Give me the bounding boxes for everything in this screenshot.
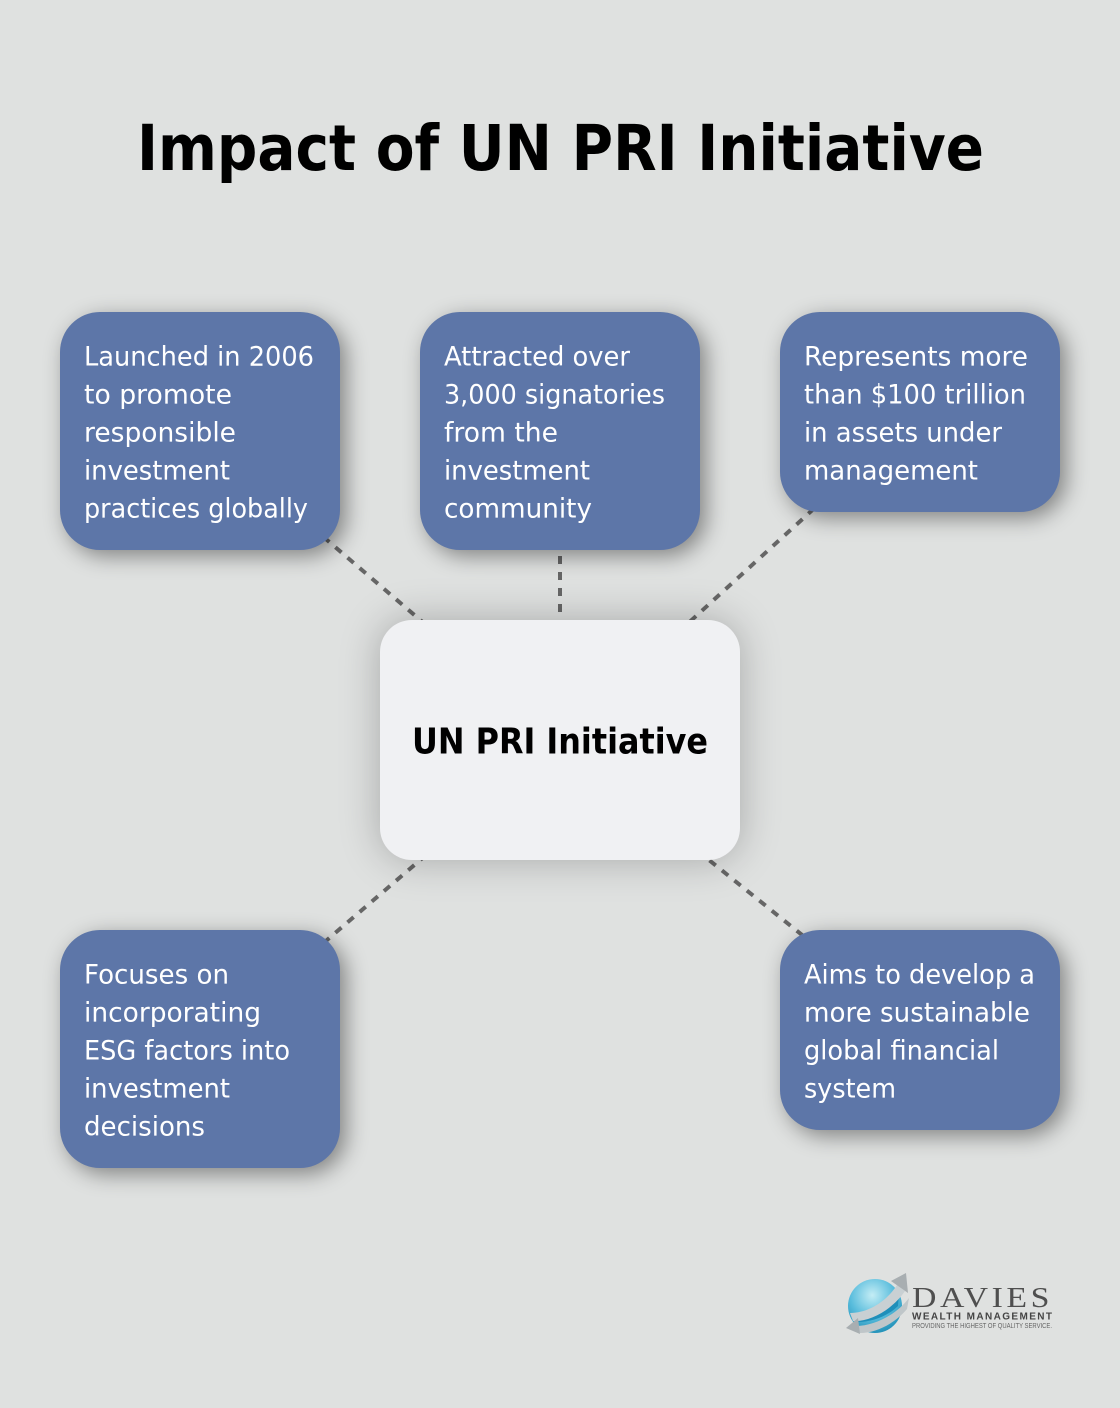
panel: 3,000 signatories: from the xyxy=(444,418,558,448)
panel: $100 trillion: Represents more xyxy=(804,342,1028,372)
panel: ESG factors: investment xyxy=(84,1074,230,1104)
logo wordmark: PROVIDING THE HIGHEST OF QUALITY SERVICE. xyxy=(912,1323,1052,1330)
panel: sustainable system xyxy=(780,930,1060,1130)
panel: ESG factors: incorporating xyxy=(84,998,261,1028)
panel: launched in 2006: practices globally xyxy=(84,494,308,524)
panel: $100 trillion: in assets under xyxy=(804,418,1003,448)
panel: ESG factors: decisions xyxy=(84,1112,205,1142)
panel: center node xyxy=(380,620,740,860)
panel: launched in 2006: Launched in 2006 xyxy=(84,342,314,372)
panel: $100 trillion xyxy=(780,312,1060,512)
panel: 3,000 signatories: investment xyxy=(444,456,590,486)
panel: ESG factors xyxy=(60,930,340,1168)
logo wordmark xyxy=(912,1283,1053,1330)
panel: $100 trillion: than $100 trillion xyxy=(804,380,1026,410)
panel: launched in 2006 xyxy=(60,312,340,550)
panel: ESG factors: ESG factors into xyxy=(84,1036,290,1066)
panel: 3,000 signatories: 3,000 signatories xyxy=(444,380,665,410)
panel: sustainable system: Aims to develop a xyxy=(804,960,1035,990)
panel: launched in 2006: responsible xyxy=(84,418,236,448)
panel: sustainable system: more sustainable xyxy=(804,998,1030,1028)
panel: 3,000 signatories xyxy=(420,312,700,550)
logo: Davies Wealth Management xyxy=(846,1273,1053,1334)
panel: launched in 2006: to promote xyxy=(84,380,232,410)
panel: sustainable system: system xyxy=(804,1074,896,1104)
panel: center node: UN PRI Initiative xyxy=(412,722,708,762)
panel: ESG factors: Focuses on xyxy=(84,960,229,990)
panel: launched in 2006: investment xyxy=(84,456,230,486)
title: Impact of UN PRI Initiative xyxy=(137,111,984,185)
logo wordmark: DAVIES xyxy=(912,1283,1053,1314)
panel: 3,000 signatories: community xyxy=(444,494,592,524)
panel: $100 trillion: management xyxy=(804,456,978,486)
panel: sustainable system: global financial xyxy=(804,1036,999,1066)
icon: globe xyxy=(846,1273,909,1334)
panel: 3,000 signatories: Attracted over xyxy=(444,342,631,372)
logo wordmark: WEALTH MANAGEMENT xyxy=(912,1312,1052,1322)
